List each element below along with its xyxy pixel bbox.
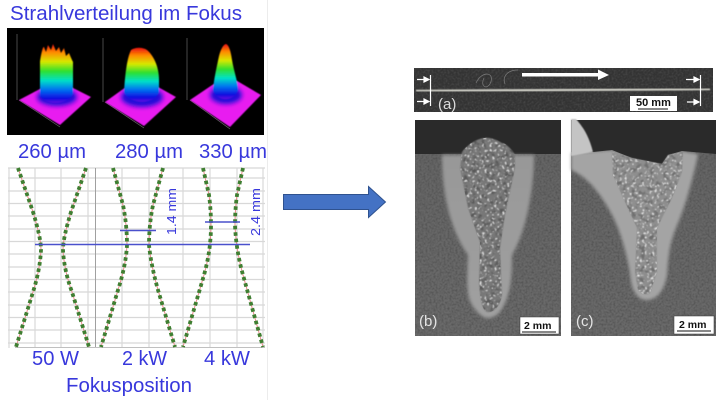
left excess bead [571,119,593,156]
label: 330 um: 330 µm [199,141,267,163]
label: 260 um: 260 µm [18,141,86,163]
weld bright texture [460,138,515,312]
panel (c): weld cross-section [571,119,716,336]
icon: profile 260 um [19,44,91,125]
dark background above plate [415,120,561,154]
icon: profile 280 um [105,48,176,126]
title: Strahlverteilung im Fokus [10,3,242,25]
label (c): (c) [576,313,594,330]
label (a): (a) [438,96,456,113]
focus line [35,244,250,246]
caustic: 50 W [16,168,89,347]
scale bar 2 mm [520,317,559,334]
weld dark texture [460,138,515,312]
dark background above plate [571,120,716,164]
label: 50 W: 50 W [32,348,79,370]
scale bar 50 mm [630,96,677,111]
scale bar 2 mm: 2 mm [679,319,706,331]
label: 4 kW: 4 kW [204,348,250,370]
chart: beam caustics [8,168,265,348]
scale bar 2 mm: 2 mm [524,320,551,332]
scale bar 50 mm: 50 mm [636,97,671,109]
weld metal [612,152,683,294]
panel: beam distribution and caustics [7,3,267,397]
scratches [476,70,518,87]
seam [416,89,710,91]
label (b): (b) [419,313,437,330]
arrow [284,186,386,218]
caustic: 2 kW [101,168,175,347]
width marker 1.4 mm [120,230,156,232]
label: 2.4 mm: 2.4 mm [248,188,263,236]
scale bar 2 mm [674,316,714,334]
heat-affected zone [571,150,698,300]
start and end markers [417,75,700,106]
width marker 2.4 mm [205,221,240,223]
label: 280 um: 280 µm [115,141,183,163]
weld dark texture [612,152,683,294]
axes of profiles [17,34,230,129]
weld bright texture [612,152,683,294]
label: 2 kW: 2 kW [122,348,167,370]
arrow: travel direction [522,70,609,80]
panel: 3D beam profiles [7,28,264,135]
icon: profile 330 um [190,44,261,127]
weld metal [460,138,515,312]
label: 1.4 mm: 1.4 mm [164,188,179,235]
heat-affected zone [442,155,534,318]
caustic: 4 kW [183,168,263,347]
axis label: Fokusposition [66,375,192,397]
panel (b): weld cross-section [415,120,561,336]
panel (a): weld seam top view [414,68,713,113]
